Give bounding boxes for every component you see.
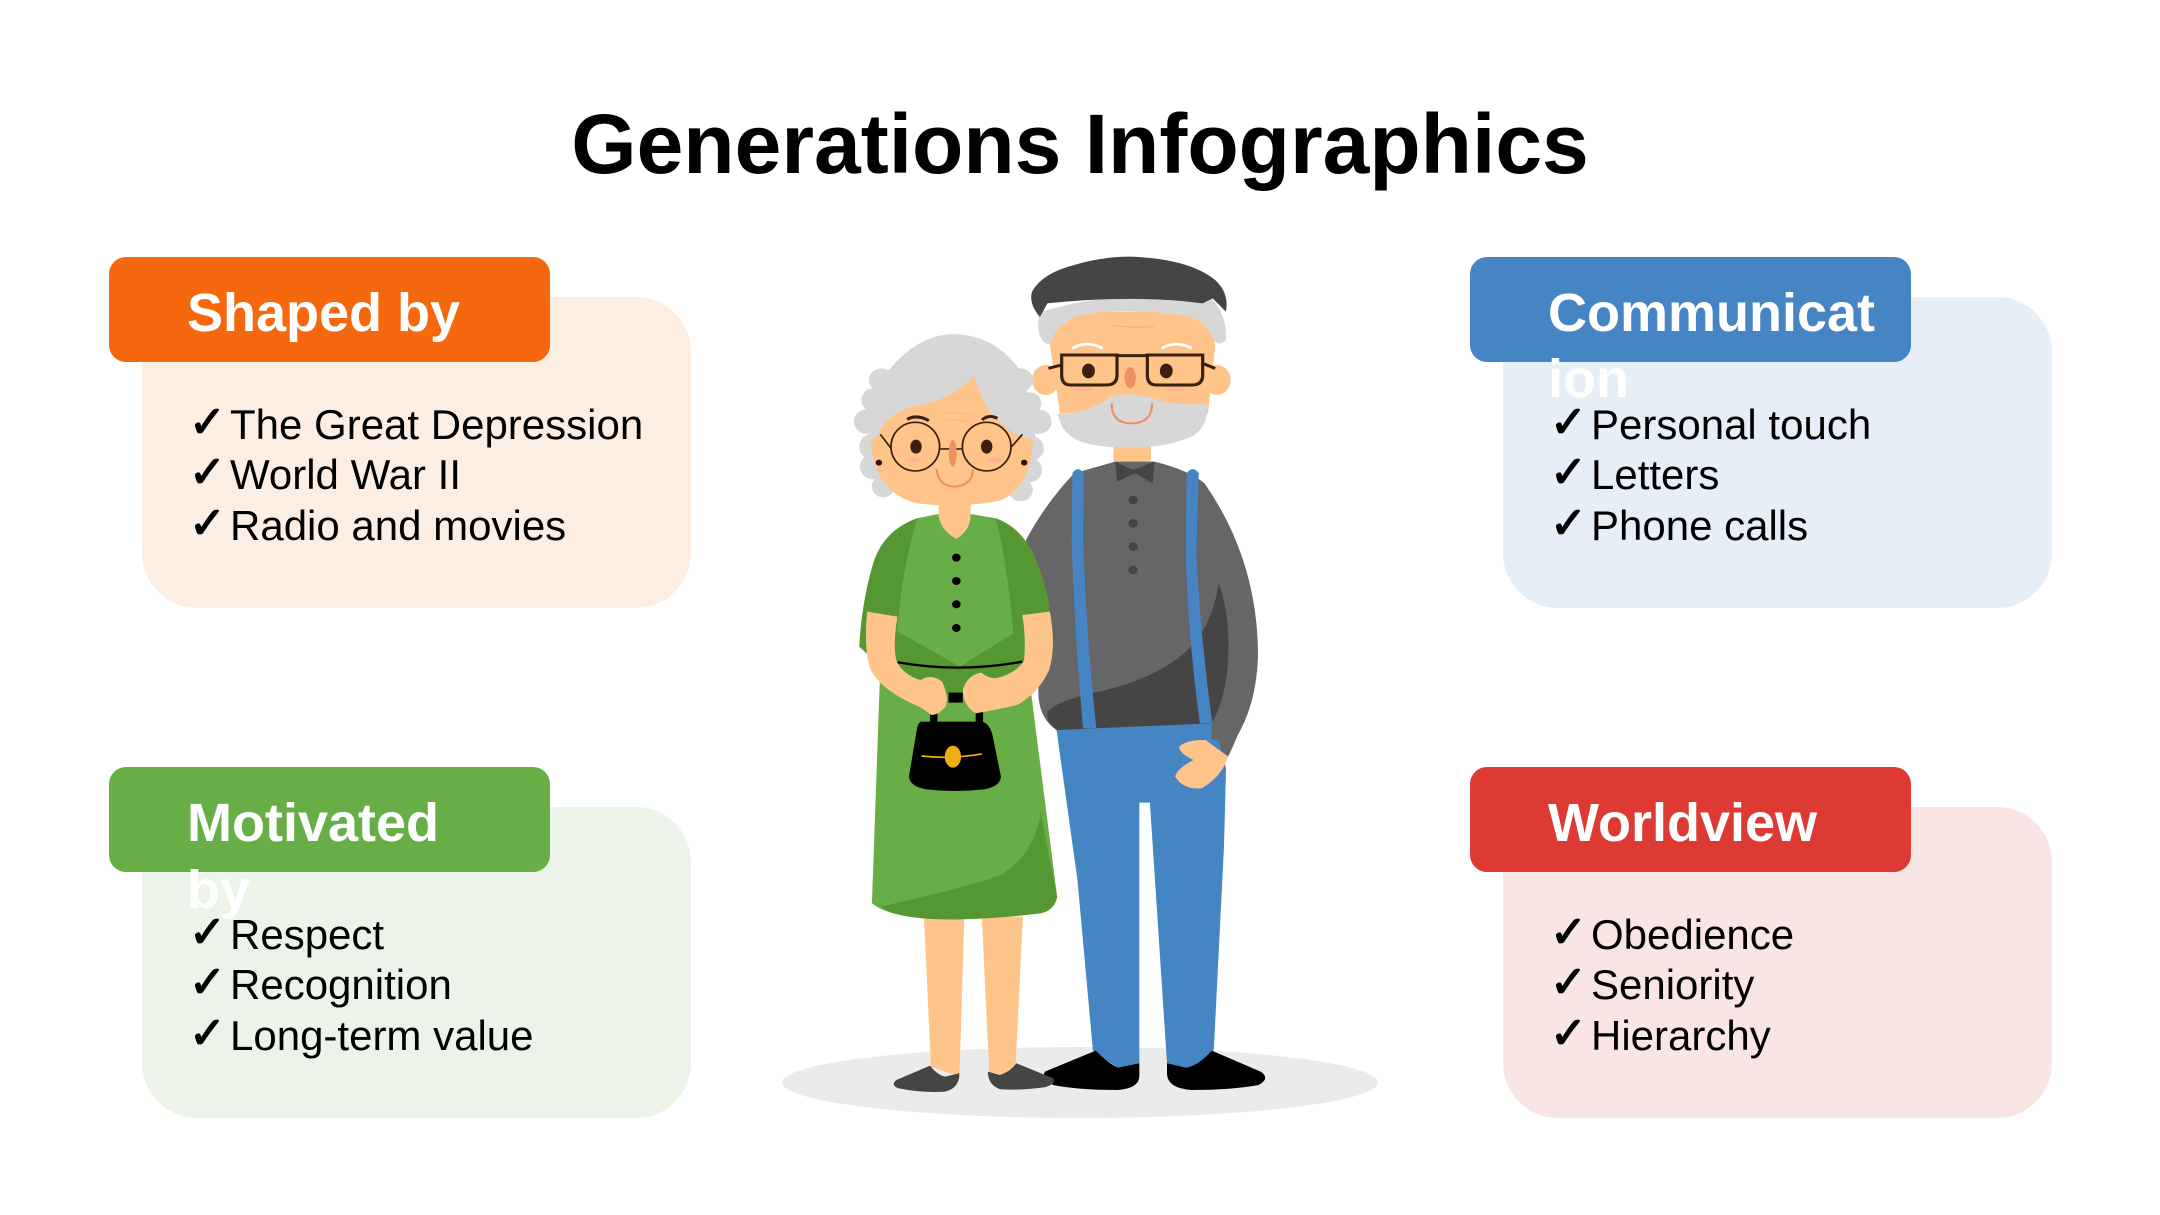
ground shadow <box>782 1047 1378 1118</box>
panel: communication: Communicat <box>1548 283 1875 343</box>
panel: communication: ion <box>1548 349 1629 409</box>
panel: motivated by: ✓ <box>189 957 226 1008</box>
panel: worldview: Worldview <box>1548 793 1818 853</box>
panel: shaped by: ✓ <box>189 447 226 498</box>
panel: worldview: Hierarchy <box>1591 1012 1771 1059</box>
panel: shaped by: ✓ <box>189 498 226 549</box>
panel: motivated by: by <box>187 860 250 920</box>
panel: shaped by: Shaped by <box>187 283 460 343</box>
illustration: elderly woman <box>854 334 1057 1092</box>
panel: worldview <box>1470 767 2052 1118</box>
panel: communication: ✓ <box>1550 498 1587 549</box>
title: Generations Infographics <box>571 97 1589 191</box>
panel: worldview: Obedience <box>1591 911 1794 958</box>
panel: motivated by: Motivated <box>187 793 439 853</box>
panel: shaped by <box>109 257 691 608</box>
panel: worldview: ✓ <box>1550 907 1587 958</box>
handbag <box>909 710 1001 791</box>
panel: shaped by: Radio and movies <box>230 502 566 549</box>
panel: motivated by <box>109 767 691 1118</box>
panel: worldview: Seniority <box>1591 961 1754 1008</box>
panel: communication: ✓ <box>1550 447 1587 498</box>
panel: shaped by: The Great Depression <box>230 401 643 448</box>
panel: worldview: ✓ <box>1550 957 1587 1008</box>
panel: worldview: ✓ <box>1550 1008 1587 1059</box>
panel: communication: ✓ <box>1550 397 1587 448</box>
illustration: elderly man <box>1026 257 1265 1090</box>
panel: communication: Letters <box>1591 451 1719 498</box>
panel: motivated by: Respect <box>230 911 384 958</box>
panel: shaped by: ✓ <box>189 397 226 448</box>
panel: shaped by: World War II <box>230 451 461 498</box>
panel: motivated by: ✓ <box>189 907 226 958</box>
panel: communication <box>1470 257 2052 608</box>
panel: motivated by: Long-term value <box>230 1012 534 1059</box>
panel: communication: Personal touch <box>1591 401 1871 448</box>
panel: communication: Phone calls <box>1591 502 1808 549</box>
panel: motivated by: Recognition <box>230 961 452 1008</box>
panel: motivated by: ✓ <box>189 1008 226 1059</box>
